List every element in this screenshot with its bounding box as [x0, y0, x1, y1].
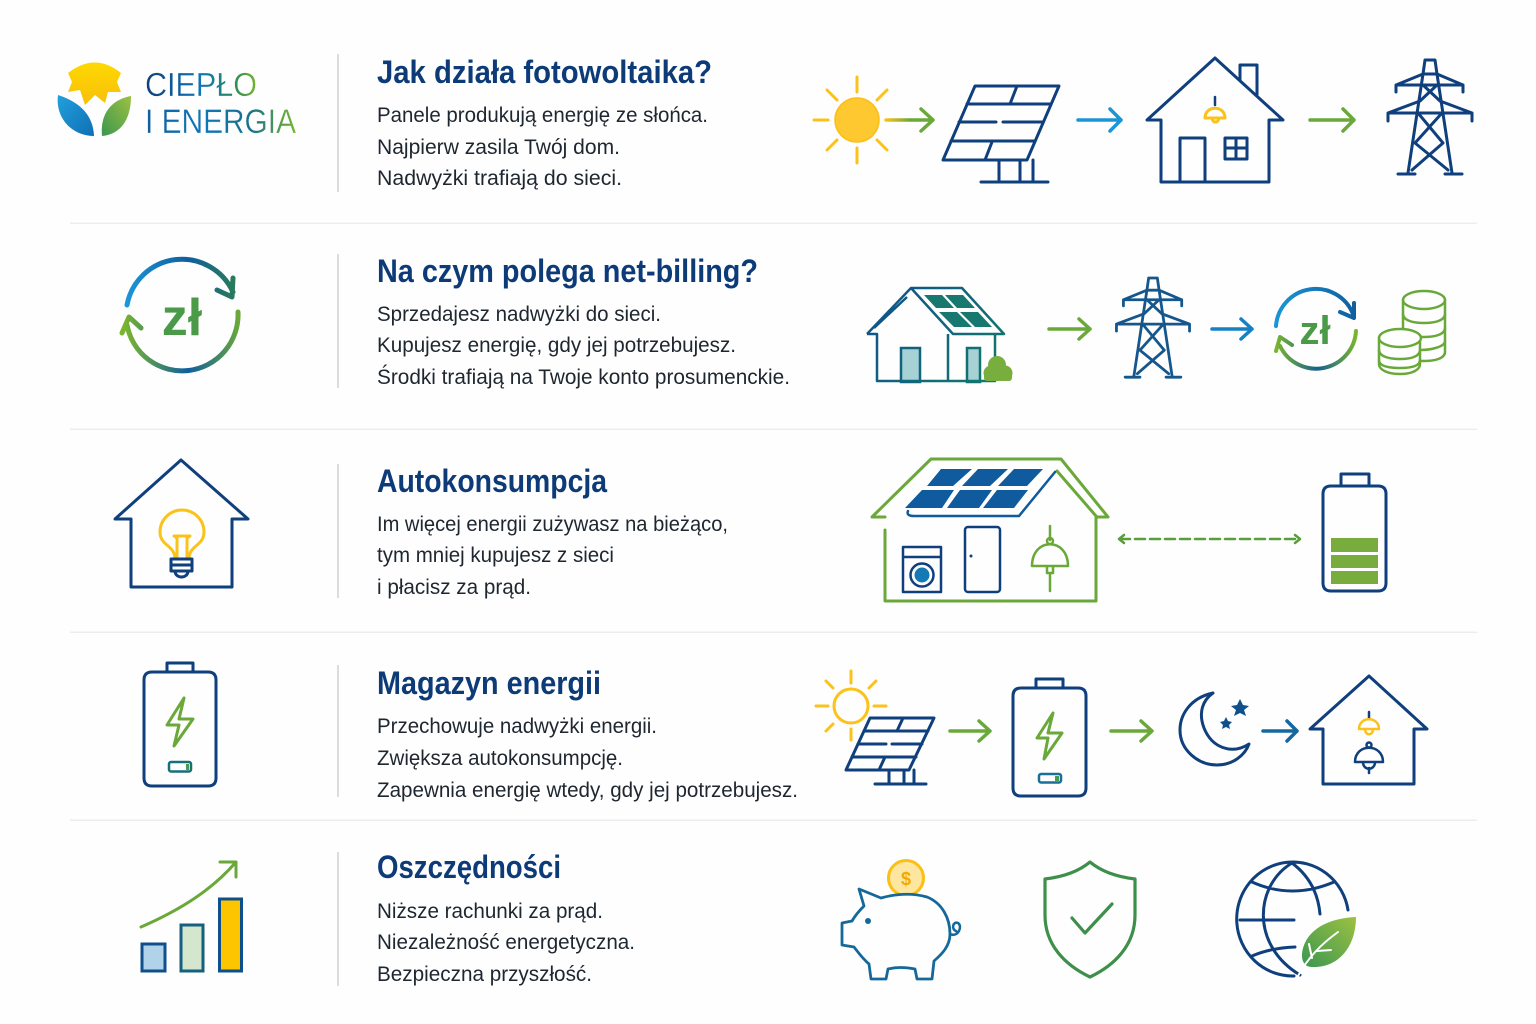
growth arrow [141, 862, 236, 927]
panel: magazyn energii [144, 663, 1427, 802]
arrow: house to grid [1049, 319, 1090, 339]
logo wordmark bottom: I ENERGIA [145, 103, 296, 141]
text block: Bezpieczna przyszłość. [377, 962, 592, 986]
vertical dividers [337, 54, 339, 986]
icon: solar panel [943, 86, 1059, 182]
row dividers [70, 222, 1477, 821]
arrow: battery to night [1111, 721, 1152, 741]
icon: zł small cycle [1276, 289, 1356, 369]
panel: autokonsumpcja [115, 459, 1386, 601]
text block: Niezależność energetyczna. [377, 930, 635, 954]
text block: Niższe rachunki za prąd. [377, 899, 603, 923]
bar small [142, 944, 165, 971]
dashed arrow [1119, 535, 1300, 543]
icon: moon and stars [1180, 693, 1249, 765]
text block [377, 512, 728, 599]
icon: house with roof panels [867, 288, 1012, 382]
arrow: grid to account [1212, 319, 1252, 339]
icon: battery with bolt [144, 663, 216, 786]
arrow: panel to battery [950, 721, 990, 741]
text block [377, 103, 708, 190]
panel: oszczędności [141, 849, 1356, 986]
star large [1231, 699, 1249, 716]
roof outline [908, 472, 1055, 516]
bolt [1037, 713, 1062, 759]
text block [377, 302, 790, 389]
panel: jak działa fotowoltaika [58, 54, 1472, 190]
icon: shield with check [1045, 862, 1135, 977]
leaf vein [1298, 932, 1338, 976]
roof panels [905, 469, 1043, 508]
arrow: night to house [1263, 721, 1297, 741]
zł symbol: zł [1299, 309, 1331, 353]
indicator [1039, 774, 1061, 782]
icon: zł cycle [122, 259, 238, 371]
logo green leaf [102, 96, 131, 136]
coin: $ [901, 869, 911, 889]
text block [377, 899, 635, 986]
text block: Sprzedajesz nadwyżki do sieci. [377, 302, 661, 326]
icon: piggy bank [842, 860, 960, 979]
yellow lamp [1359, 712, 1379, 734]
text block: Im więcej energii zużywasz na bieżąco, [377, 512, 728, 536]
text block: Panele produkują energię ze słońca. [377, 103, 708, 127]
star small [1220, 717, 1232, 729]
logo sun [68, 62, 121, 105]
roof panels [924, 295, 992, 327]
text block: Zwiększa autokonsumpcję. [377, 746, 623, 770]
logo blue leaf [58, 95, 94, 136]
lamp [1032, 526, 1068, 591]
text block: Zapewnia energię wtedy, gdy jej potrzebujesz. [377, 778, 798, 802]
icon: sun [814, 77, 887, 163]
icon: power pylon [1116, 278, 1190, 377]
heading: Autokonsumpcja [377, 463, 607, 499]
logo: Ciepło i Energia [58, 62, 296, 141]
bolt [167, 698, 193, 746]
text block: Nadwyżki trafiają do sieci. [377, 166, 622, 190]
text block: Środki trafiają na Twoje konto prosumenckie. [377, 364, 790, 389]
icon: house with lamp [1147, 58, 1283, 182]
icon: coins [1379, 291, 1445, 374]
text block: tym mniej kupujesz z sieci [377, 543, 614, 567]
text block: Kupujesz energię, gdy jej potrzebujesz. [377, 333, 736, 357]
bulb base [171, 559, 192, 577]
icon: house with appliances [872, 459, 1108, 601]
heading: Oszczędności [377, 849, 561, 885]
bush [984, 356, 1012, 381]
text block: i płacisz za prąd. [377, 575, 531, 599]
bar tall [220, 899, 242, 971]
lamp [1205, 97, 1225, 122]
text block: Przechowuje nadwyżki energii. [377, 714, 657, 738]
heading: Na czym polega net-billing? [377, 253, 758, 289]
washing machine [903, 547, 941, 592]
bulb [160, 510, 204, 559]
icon: sun [816, 671, 886, 740]
logo wordmark top: CIEPŁO [145, 66, 257, 103]
door [965, 527, 1000, 592]
icon: globe with leaf [1237, 862, 1356, 976]
text block: Najpierw zasila Twój dom. [377, 135, 620, 159]
bar medium [181, 925, 203, 971]
arrow: panel to house [1078, 109, 1121, 131]
zł symbol: zł [162, 289, 203, 347]
blue lamp [1355, 742, 1383, 773]
arrow: sun to panel [886, 109, 933, 131]
icon: growth chart [141, 862, 242, 971]
text block [377, 714, 798, 802]
panel: net-billing [122, 253, 1445, 389]
icon: house with lamps [1310, 676, 1427, 784]
leaf [1302, 917, 1356, 967]
eye [865, 918, 871, 924]
indicator [169, 762, 191, 772]
charge bars [1331, 538, 1378, 584]
icon: solar panel [846, 718, 934, 784]
icon: power pylon [1388, 60, 1472, 174]
tail [950, 923, 960, 935]
icon: battery [1323, 474, 1386, 591]
arrow: house to grid [1310, 109, 1354, 131]
heading: Jak działa fotowoltaika? [377, 54, 712, 90]
icon: house with bulb [115, 460, 248, 587]
heading: Magazyn energii [377, 665, 601, 701]
icon: battery with bolt [1013, 679, 1086, 796]
